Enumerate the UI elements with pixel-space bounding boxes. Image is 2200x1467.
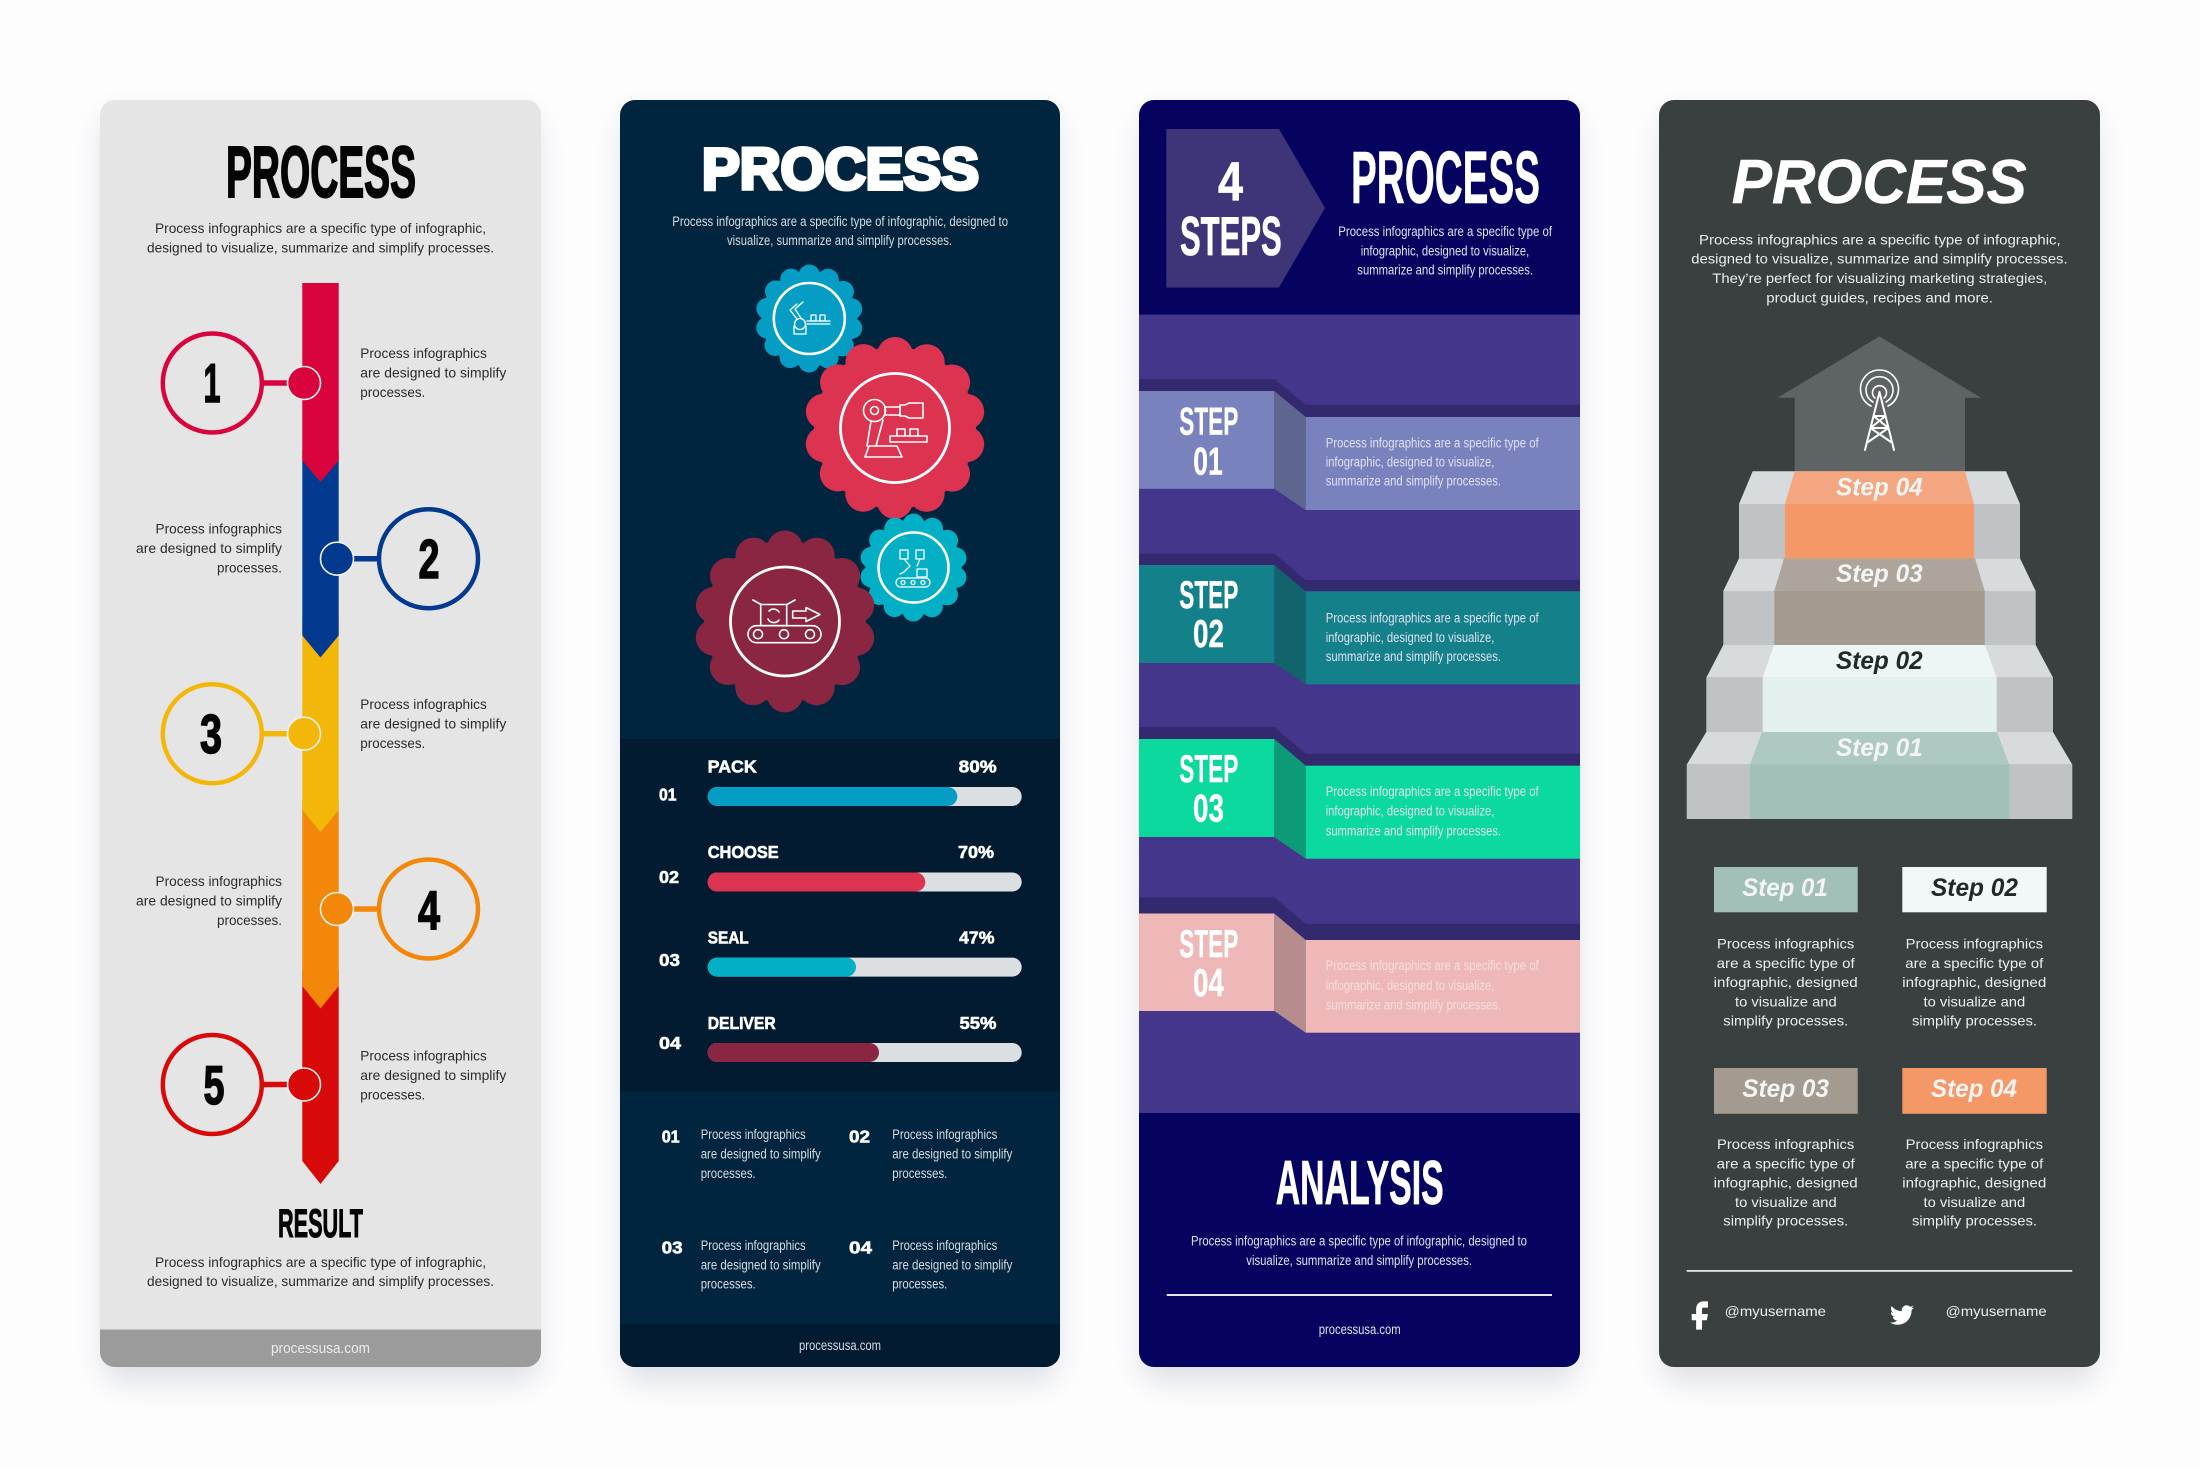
step 03 ribbon: summarize and simplify processes. <box>1326 823 1501 838</box>
footer bar <box>100 1330 541 1368</box>
step 01 ribbon: infographic, designed to visualize, <box>1326 455 1494 470</box>
legend: step 01: simplify processes. <box>1723 1013 1848 1029</box>
step 01 ribbon: Process infographics are a specific type of <box>1326 435 1539 450</box>
bar: pack 80%: 80% <box>959 757 997 777</box>
step 04 ribbon: STEP <box>1179 923 1238 966</box>
step 3 marker <box>163 684 320 783</box>
step 03 ribbon: STEP <box>1179 748 1238 791</box>
step 1 text <box>360 345 506 400</box>
result heading: RESULT <box>278 1202 363 1246</box>
step 2 text: are designed to simplify <box>136 540 282 556</box>
intro text: Process infographics are a specific type of infographic, <box>155 220 486 236</box>
intro text: infographic, designed to visualize, <box>1361 243 1529 258</box>
intro text <box>1691 232 2068 305</box>
icon: robot arm and conveyor <box>790 302 830 334</box>
badge: 4 steps: 4 <box>1218 150 1243 212</box>
step 01 ribbon <box>1139 379 1580 510</box>
gear: large red robot arm <box>814 347 976 509</box>
intro text: designed to visualize, summarize and simplify processes. <box>147 240 494 256</box>
note 03: are designed to simplify <box>701 1257 821 1272</box>
note 02: Process infographics <box>892 1127 998 1142</box>
intro text: designed to visualize, summarize and simplify processes. <box>1691 251 2068 267</box>
legend: step 01: are a specific type of <box>1717 955 1855 971</box>
legend: step 01 <box>1714 867 1858 1029</box>
intro text: product guides, recipes and more. <box>1766 289 1993 305</box>
step 1 text: are designed to simplify <box>360 364 506 380</box>
bar: choose 70%: 02 <box>659 867 679 887</box>
step 03 ribbon: Process infographics are a specific type of <box>1326 784 1539 799</box>
progress chart <box>659 757 1022 1062</box>
gear: small blue robot arm <box>761 270 857 366</box>
panel: gears and progress card <box>620 100 1060 1368</box>
step 5 text: Process infographics <box>360 1048 487 1064</box>
step 3 marker: 3 <box>200 703 222 765</box>
icon: facebook <box>1692 1301 1708 1330</box>
legend: step 01: Step 01 <box>1742 874 1828 902</box>
title: PROCESS <box>1732 148 2027 217</box>
note 03: processes. <box>701 1276 756 1292</box>
analysis heading: ANALYSIS <box>1276 1149 1444 1218</box>
note 04 <box>849 1238 1013 1292</box>
note 03: 03 <box>662 1238 683 1258</box>
intro text: Process infographics are a specific type of <box>1338 224 1552 239</box>
icon: twitter <box>1890 1305 1914 1325</box>
legend: step 02: to visualize and <box>1924 994 2025 1010</box>
step 4 marker <box>320 860 478 958</box>
intro text: Process infographics are a specific type of infographic, designed to <box>672 214 1008 229</box>
note 02 <box>849 1126 1013 1181</box>
step 2 marker: 2 <box>418 528 440 590</box>
bar: choose 70% <box>659 842 1022 892</box>
intro text <box>672 214 1008 248</box>
legend: step 03: are a specific type of <box>1717 1155 1855 1171</box>
panel: four steps ribbon card <box>1139 100 1580 1367</box>
bar: deliver 55%: 55% <box>960 1013 997 1033</box>
step 04 ribbon: Process infographics are a specific type of <box>1326 958 1539 973</box>
bar: choose 70%: CHOOSE <box>708 842 779 862</box>
step 1 text: processes. <box>360 384 425 400</box>
step 02 ribbon: 02 <box>1193 613 1224 656</box>
step 02 ribbon: summarize and simplify processes. <box>1326 649 1501 664</box>
legend: step 01: Process infographics <box>1717 936 1854 952</box>
step 3 text <box>360 696 506 751</box>
step 4 text <box>136 873 282 928</box>
legend: step 04: Process infographics <box>1906 1136 2043 1152</box>
stair: step 03 <box>1723 558 2036 645</box>
intro text <box>147 220 494 256</box>
step 01 ribbon: STEP <box>1179 400 1238 443</box>
bar: seal 47%: 03 <box>659 950 680 970</box>
panel: timeline process card <box>100 100 541 1368</box>
staircase <box>1687 471 2072 819</box>
stair: step 02 <box>1706 645 2053 732</box>
note 04: processes. <box>892 1276 947 1292</box>
title: PROCESS <box>1351 136 1540 219</box>
legend: step 04 <box>1902 1068 2047 1229</box>
note 03 <box>662 1238 821 1292</box>
note 01: processes. <box>701 1166 756 1181</box>
note 04: are designed to simplify <box>892 1257 1013 1272</box>
step 2 text <box>136 520 282 576</box>
legend: step 04: Step 04 <box>1931 1075 2017 1103</box>
bar: deliver 55%: DELIVER <box>708 1013 776 1033</box>
legend: step 02: are a specific type of <box>1905 955 2043 971</box>
note 01 <box>662 1126 821 1181</box>
intro text: summarize and simplify processes. <box>1357 262 1533 278</box>
note 03: Process infographics <box>701 1238 806 1253</box>
step 04 ribbon: infographic, designed to visualize, <box>1326 978 1494 993</box>
legend: step 03 <box>1714 1068 1858 1229</box>
step 4 text: Process infographics <box>156 873 282 889</box>
step 4 text: are designed to simplify <box>136 892 282 908</box>
bar: seal 47%: 47% <box>959 928 995 948</box>
step 03 ribbon: 03 <box>1193 788 1224 830</box>
analysis text: Process infographics are a specific type of infographic, designed to <box>1191 1234 1527 1249</box>
goal arrow <box>1778 336 1981 471</box>
step 2 text: Process infographics <box>156 520 282 536</box>
legend: step 03: to visualize and <box>1735 1194 1837 1210</box>
bar: choose 70%: 70% <box>958 842 994 862</box>
icon: claws on a conveyor <box>896 550 930 587</box>
analysis text: visualize, summarize and simplify processes. <box>1246 1253 1472 1268</box>
footer bar: processusa.com <box>271 1341 370 1357</box>
step 4 marker: 4 <box>418 879 440 941</box>
legend: step 04: infographic, designed <box>1902 1175 2046 1191</box>
bar: pack 80%: 01 <box>659 784 677 804</box>
bar: pack 80% <box>659 757 1022 806</box>
stair: step 03: Step 03 <box>1836 560 1923 588</box>
arrow timeline <box>302 283 339 1184</box>
note 02: are designed to simplify <box>892 1147 1013 1162</box>
step 01 ribbon: summarize and simplify processes. <box>1326 474 1501 489</box>
step 01 ribbon: 01 <box>1193 441 1223 484</box>
legend: step 03: Step 03 <box>1742 1075 1829 1103</box>
step 2 marker <box>320 509 478 608</box>
note 01: Process infographics <box>701 1127 806 1142</box>
stair: step 01: Step 01 <box>1836 734 1923 762</box>
result text <box>147 1254 494 1289</box>
step 5 text: are designed to simplify <box>360 1067 506 1083</box>
note 04: Process infographics <box>892 1238 998 1253</box>
bar: deliver 55%: 04 <box>659 1033 681 1053</box>
stair: step 01 <box>1687 732 2072 819</box>
footer url: processusa.com <box>799 1338 881 1353</box>
intro text: Process infographics are a specific type of infographic, <box>1699 232 2061 248</box>
stair: step 04 <box>1739 471 2020 558</box>
username: facebook: @myusername <box>1725 1303 1826 1319</box>
legend: step 04: are a specific type of <box>1905 1155 2043 1171</box>
stair: step 04: Step 04 <box>1836 474 1923 502</box>
username: twitter: @myusername <box>1946 1303 2047 1319</box>
note 02: 02 <box>849 1126 870 1146</box>
title: PROCESS <box>702 137 979 202</box>
legend: step 03: simplify processes. <box>1723 1213 1848 1229</box>
bar: seal 47% <box>659 928 1022 977</box>
bar: seal 47%: SEAL <box>708 928 749 948</box>
step 3 text: processes. <box>360 735 425 751</box>
legend: step 03: Process infographics <box>1717 1136 1854 1152</box>
step 03 ribbon: infographic, designed to visualize, <box>1326 804 1494 819</box>
stair: step 02: Step 02 <box>1836 647 1923 675</box>
intro text: visualize, summarize and simplify processes. <box>727 233 952 248</box>
bar: pack 80%: PACK <box>708 757 757 777</box>
legend: step 02: simplify processes. <box>1912 1013 2037 1029</box>
note 02: processes. <box>892 1166 947 1181</box>
result text: designed to visualize, summarize and simplify processes. <box>147 1273 494 1289</box>
step 03 ribbon <box>1139 727 1580 859</box>
step 04 ribbon: 04 <box>1193 962 1224 1005</box>
step 04 ribbon <box>1139 897 1580 1033</box>
legend: step 03: infographic, designed <box>1714 1175 1858 1191</box>
step 1 text: Process infographics <box>360 345 487 361</box>
intro text: They’re perfect for visualizing marketing strategies, <box>1712 270 2047 286</box>
step 5 text: processes. <box>360 1086 425 1102</box>
step 5 text <box>360 1048 506 1102</box>
legend: step 01: infographic, designed <box>1714 974 1858 990</box>
intro text <box>1338 224 1552 278</box>
footer url: processusa.com <box>1319 1322 1401 1337</box>
step 4 text: processes. <box>217 912 282 928</box>
bar: deliver 55% <box>659 1013 1022 1062</box>
step 5 marker: 5 <box>204 1054 224 1116</box>
step 3 text: are designed to simplify <box>360 716 506 732</box>
icon: box on conveyor with arrow <box>748 600 821 643</box>
legend: step 02: Step 02 <box>1931 874 2018 902</box>
gear: large maroon conveyor <box>704 540 866 702</box>
analysis text <box>1191 1234 1527 1268</box>
note 01: 01 <box>662 1126 680 1146</box>
step 02 ribbon: STEP <box>1179 574 1238 617</box>
step 5 marker <box>163 1035 320 1134</box>
gear: small teal robot claws <box>866 520 962 616</box>
legend: step 02: infographic, designed <box>1902 974 2046 990</box>
step 1 marker <box>163 334 320 432</box>
title: PROCESS <box>226 133 416 213</box>
icon: industrial robot <box>864 400 927 457</box>
legend: step 04: simplify processes. <box>1912 1213 2037 1229</box>
legend: step 02 <box>1902 867 2047 1029</box>
result text: Process infographics are a specific type of infographic, <box>155 1254 486 1270</box>
icon: radio tower <box>1860 370 1898 450</box>
badge: 4 steps <box>1166 129 1325 288</box>
note 04: 04 <box>849 1238 872 1258</box>
badge: 4 steps: STEPS <box>1180 205 1282 267</box>
legend: step 01: to visualize and <box>1735 994 1837 1010</box>
panel: staircase card <box>1659 100 2100 1367</box>
step 02 ribbon <box>1139 554 1580 684</box>
step 1 marker: 1 <box>204 352 220 414</box>
legend: step 04: to visualize and <box>1924 1194 2025 1210</box>
step 2 text: processes. <box>217 560 282 576</box>
legend: step 02: Process infographics <box>1906 936 2043 952</box>
step 02 ribbon: Process infographics are a specific type of <box>1326 611 1539 626</box>
step 02 ribbon: infographic, designed to visualize, <box>1326 630 1494 645</box>
step 04 ribbon: summarize and simplify processes. <box>1326 998 1501 1013</box>
note 01: are designed to simplify <box>701 1147 821 1162</box>
step 3 text: Process infographics <box>360 696 487 712</box>
